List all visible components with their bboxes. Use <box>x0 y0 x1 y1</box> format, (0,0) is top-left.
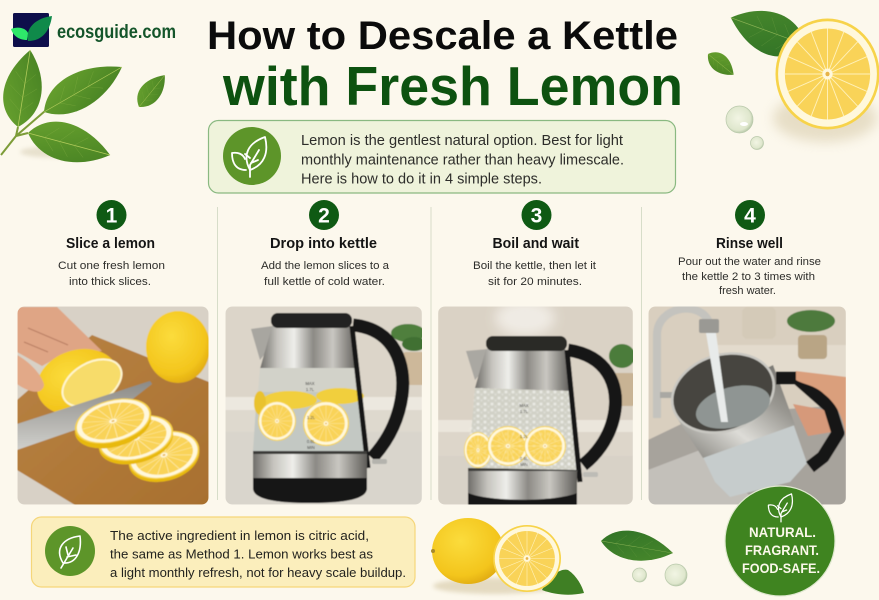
capacity marks: 0.6L <box>520 456 529 461</box>
plant and pot <box>787 310 835 359</box>
logo: ecosguide.com <box>11 13 176 47</box>
step 3 <box>473 200 597 288</box>
bottom leaf <box>599 526 675 567</box>
capacity marks: MAX <box>519 403 529 408</box>
step 1: Cut one fresh lemon <box>58 260 165 272</box>
step 1: into thick slices. <box>69 276 151 288</box>
intro text: Here is how to do it in 4 simple steps. <box>301 172 542 188</box>
step 3: sit for 20 minutes. <box>488 276 582 288</box>
icon: leaf <box>45 526 95 576</box>
step 2: Add the lemon slices to a <box>261 260 390 272</box>
badge text <box>742 524 820 576</box>
step 4 <box>678 200 821 297</box>
step 4: Pour out the water and rinse <box>678 256 821 268</box>
step 4: 4 <box>744 204 756 228</box>
step 2: full kettle of cold water. <box>264 276 385 288</box>
title: with Fresh Lemon <box>222 55 683 117</box>
callout text: a light monthly refresh, not for heavy scale buildup. <box>110 565 406 580</box>
logo: ecosguide.com: ecosguide.com <box>57 22 176 43</box>
step 1: Slice a lemon <box>66 236 155 252</box>
title: How to Descale a Kettle <box>207 14 678 58</box>
step 3: Boil and wait <box>492 236 579 252</box>
bottom lemons and leaf <box>431 518 584 595</box>
capacity marks: 1.2L <box>520 434 529 439</box>
leaf sprig top left <box>0 47 172 172</box>
step 3: Boil the kettle, then let it <box>473 260 597 272</box>
badge: natural, fragrant, food-safe <box>725 486 835 596</box>
callout text: the same as Method 1. Lemon works best as <box>110 546 373 562</box>
step 4: fresh water. <box>719 285 776 297</box>
capacity marks: MIN <box>520 462 528 467</box>
badge text: FRAGRANT. <box>745 542 819 558</box>
steam <box>493 306 557 336</box>
badge text: NATURAL. <box>749 524 816 540</box>
callout text: The active ingredient in lemon is citric acid, <box>110 528 369 543</box>
badge text: FOOD-SAFE. <box>742 560 820 576</box>
step 2 <box>261 200 390 288</box>
bowl <box>742 307 776 339</box>
capacity marks: MIN <box>307 445 315 450</box>
upper hand <box>796 371 846 437</box>
capacity marks: MAX <box>305 381 315 386</box>
top right lemon, leaves and drops <box>703 0 879 149</box>
capacity marks: 1.7L <box>520 409 529 414</box>
capacity marks: 0.6L <box>307 439 316 444</box>
step 1 <box>58 200 165 288</box>
intro text: monthly maintenance rather than heavy limescale. <box>301 152 624 168</box>
icon: badge leaves <box>768 494 792 522</box>
photo: slicing a lemon <box>17 306 210 505</box>
intro text: Lemon is the gentlest natural option. Best for light <box>301 133 623 149</box>
capacity marks: 1.7L <box>306 387 315 392</box>
callout text <box>110 528 406 580</box>
title <box>207 14 683 117</box>
step 2: Drop into kettle <box>270 236 377 252</box>
plant and pot <box>391 324 426 385</box>
water drops <box>632 564 687 586</box>
capacity marks: 1.2L <box>307 415 316 420</box>
capacity marks <box>305 381 316 450</box>
plant and pot <box>609 344 635 406</box>
step 3: 3 <box>531 204 542 228</box>
capacity marks <box>519 403 529 467</box>
photo: boiling kettle <box>438 300 635 505</box>
icon: leaves <box>223 127 281 185</box>
photo: lemon slices in kettle <box>225 306 426 505</box>
callout: citric acid <box>32 517 415 587</box>
photo: rinsing kettle <box>648 306 846 505</box>
intro panel <box>208 120 676 193</box>
step 4: Rinse well <box>716 236 783 252</box>
step 1: 1 <box>106 204 118 228</box>
lower fingers <box>793 404 832 436</box>
intro text <box>301 133 624 188</box>
step 4: the kettle 2 to 3 times with <box>682 271 815 283</box>
faucet <box>657 309 719 418</box>
step 2: 2 <box>318 204 330 228</box>
